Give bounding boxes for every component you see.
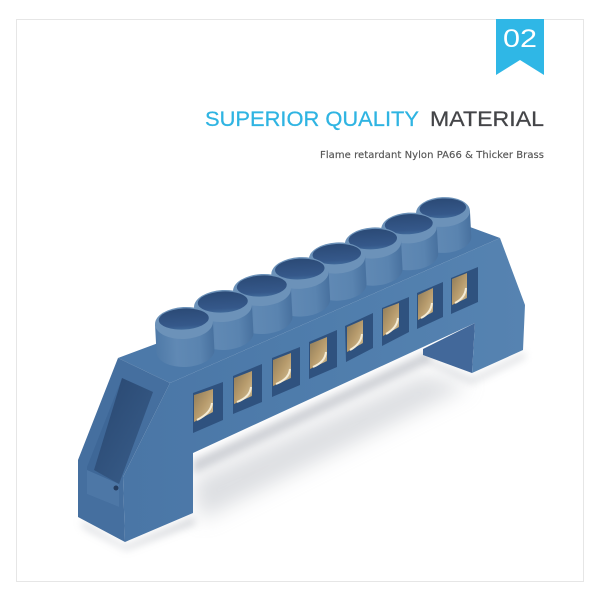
terminal windows with brass	[193, 267, 478, 433]
ribbon badge	[496, 19, 544, 75]
title: SUPERIOR QUALITY	[205, 108, 419, 131]
tube 4	[271, 256, 331, 318]
title	[205, 108, 544, 131]
badge number: 02	[503, 25, 537, 53]
tube 8	[415, 196, 472, 254]
front face	[123, 238, 525, 542]
subtitle: Flame retardant Nylon PA66 & Thicker Brass	[320, 150, 544, 161]
tube 3	[232, 273, 293, 335]
left end face	[78, 358, 170, 542]
tube 6	[344, 226, 403, 287]
shadow beneath bar	[80, 350, 525, 550]
tube 5	[308, 241, 367, 302]
tube 7	[380, 211, 439, 272]
tube 1	[154, 306, 215, 368]
top face	[118, 227, 500, 383]
right leg inner side	[423, 323, 475, 373]
product: blue brass terminal bar	[78, 196, 525, 550]
end recess	[87, 378, 153, 507]
tube 2	[193, 289, 254, 351]
title: MATERIAL	[430, 108, 544, 131]
